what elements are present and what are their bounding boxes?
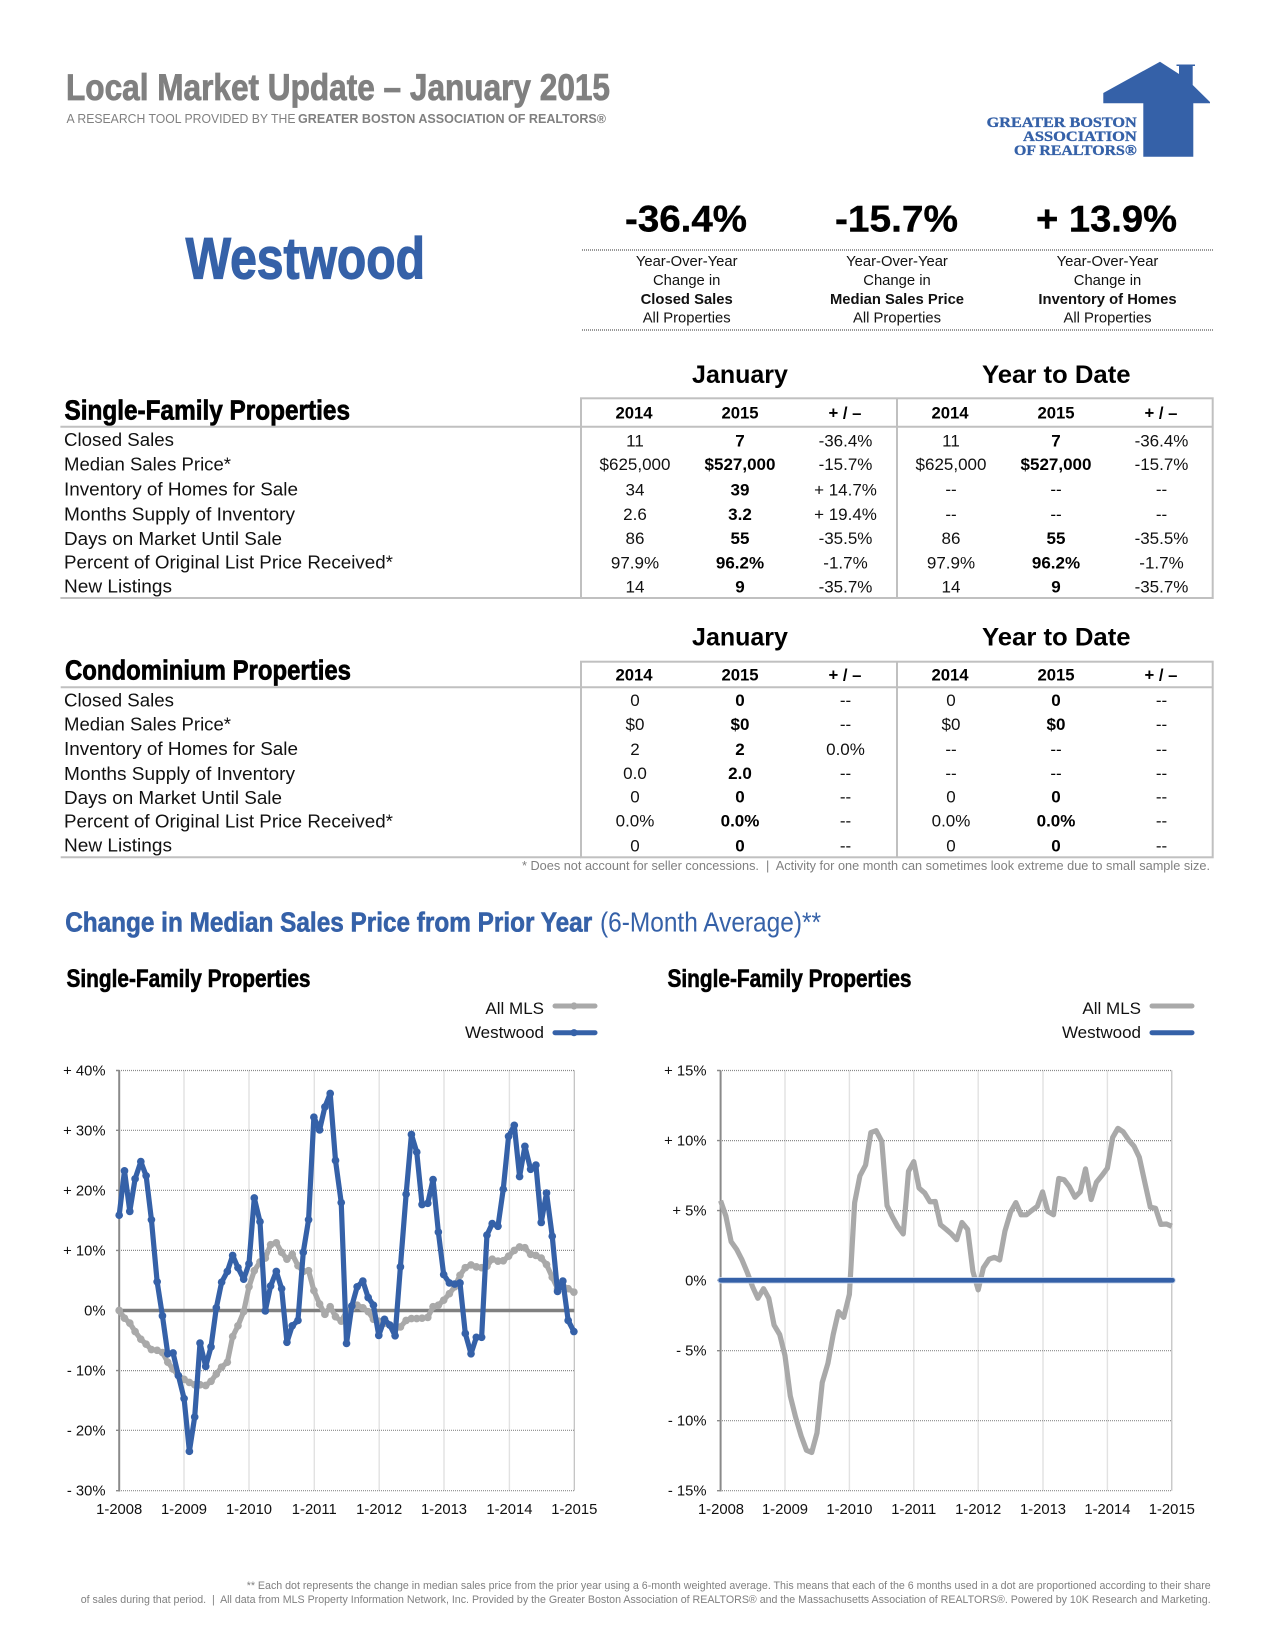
row labels: Days on Market Until Sale <box>64 528 282 549</box>
table values: -- <box>1156 505 1167 524</box>
x-axis labels: 1-2011 <box>891 1502 936 1518</box>
column headers <box>615 403 1177 422</box>
metric: median sales price: Median Sales Price <box>830 292 964 308</box>
panel: single-family properties table <box>60 361 1213 598</box>
table values: $0 <box>1047 715 1065 734</box>
row labels: Median Sales Price* <box>64 714 231 735</box>
table values: -- <box>840 837 851 856</box>
chart title: Single-Family Properties <box>66 965 310 993</box>
table values: 0.0% <box>1037 812 1075 831</box>
table values: 97.9% <box>611 553 659 572</box>
metric: inventory of homes <box>1036 199 1177 327</box>
table values: 86 <box>942 529 960 548</box>
panel: condominium properties table <box>61 624 1213 857</box>
table values: -35.7% <box>819 578 872 597</box>
table values <box>600 432 1188 597</box>
column headers: 2015 <box>1037 403 1075 422</box>
x-axis labels: 1-2014 <box>1084 1502 1130 1518</box>
x-axis labels: 1-2013 <box>421 1502 467 1518</box>
table values: 34 <box>626 480 644 499</box>
table values: -- <box>945 480 957 499</box>
table values: -- <box>1050 480 1062 499</box>
metric: closed sales: All Properties <box>643 311 731 327</box>
table values: -1.7% <box>1139 553 1184 572</box>
table values: $527,000 <box>1021 455 1091 474</box>
metric: median sales price: -15.7% <box>835 199 958 240</box>
metric: median sales price: All Properties <box>853 311 941 327</box>
table values: 11 <box>942 432 960 451</box>
row labels: New Listings <box>64 576 172 597</box>
table values: 0.0% <box>616 812 654 831</box>
y-axis labels: + 30% <box>63 1123 106 1139</box>
table values: 7 <box>735 432 745 451</box>
metric: closed sales: Closed Sales <box>641 292 733 308</box>
table values: 0.0% <box>826 740 865 759</box>
table values: 2 <box>630 740 640 759</box>
footer: methodology note: ** Each dot represents the change in median sales price from the prior year using a 6-month weighted average. This means that each of the 6 months used in a dot are proportioned according to their share <box>247 1580 1211 1592</box>
table values: 96.2% <box>1032 553 1080 572</box>
table values: $625,000 <box>916 455 986 474</box>
table values: -- <box>1156 480 1167 499</box>
y-axis labels: + 10% <box>664 1134 706 1150</box>
chart: left single-family line chart <box>63 965 597 1518</box>
y-axis labels: - 30% <box>67 1484 106 1500</box>
table values: 9 <box>1051 578 1061 597</box>
table values: 0.0 <box>623 764 647 783</box>
table values: 55 <box>1047 529 1065 548</box>
table values: 55 <box>731 529 749 548</box>
legend: Westwood <box>465 1023 544 1042</box>
table values: -- <box>840 764 851 783</box>
table values: 2.0 <box>728 764 752 783</box>
panel: single-family properties table: Year to Date <box>982 361 1131 389</box>
column headers <box>615 666 1177 685</box>
x-axis labels: 1-2009 <box>762 1502 808 1518</box>
column headers: 2015 <box>721 666 759 685</box>
row labels <box>64 429 393 597</box>
heading: town name Westwood: Westwood <box>186 227 425 292</box>
y-axis labels: 0% <box>685 1273 706 1289</box>
row labels: Closed Sales <box>64 429 174 450</box>
x-axis labels: 1-2010 <box>226 1502 272 1518</box>
x-axis labels: 1-2009 <box>161 1502 207 1518</box>
heading: change in median sales price: (6-Month Average)** <box>600 907 821 938</box>
table values: 11 <box>626 432 644 451</box>
footer: methodology note: of sales during that period. | All data from MLS Property Information Network, Inc. Provided by the Greater Boston Association of REALTORS® and the Massachusetts Association of REALTORS®. Powered by 10K Research and Marketing. <box>81 1594 1211 1606</box>
metric: closed sales: -36.4% <box>625 199 747 240</box>
x-axis labels: 1-2012 <box>955 1502 1001 1518</box>
table values: -- <box>1050 740 1062 759</box>
x-axis labels: 1-2015 <box>1149 1502 1195 1518</box>
table values: $527,000 <box>705 455 775 474</box>
table values: $0 <box>731 715 749 734</box>
heading: change in median sales price: Change in Median Sales Price from Prior Year <box>65 907 592 938</box>
x-axis labels: 1-2012 <box>356 1502 402 1518</box>
row labels: Closed Sales <box>64 690 174 711</box>
column headers: 2015 <box>1037 666 1075 685</box>
chart title: Single-Family Properties <box>668 965 912 993</box>
y-axis labels: + 15% <box>664 1064 706 1080</box>
table values: 0 <box>630 691 640 710</box>
logo: Greater Boston Association of Realtors: OF REALTORS® <box>1014 143 1137 159</box>
column headers: + / – <box>1145 666 1177 685</box>
y-axis labels: - 5% <box>676 1344 706 1360</box>
table values: -15.7% <box>1135 455 1188 474</box>
y-axis labels: + 10% <box>63 1243 106 1259</box>
footer: methodology note <box>81 1580 1211 1606</box>
y-axis labels: + 40% <box>63 1064 106 1080</box>
legend: All MLS <box>1082 999 1141 1018</box>
column headers: 2014 <box>931 403 969 422</box>
table values: 0 <box>735 837 745 856</box>
row labels: Median Sales Price* <box>64 454 231 475</box>
column headers: + / – <box>829 666 861 685</box>
logo: Greater Boston Association of Realtors: ASSOCIATION <box>1023 129 1137 145</box>
subtitle: research tool line: A RESEARCH TOOL PROVIDED BY THE <box>66 111 296 126</box>
table values: + 19.4% <box>814 505 877 524</box>
row labels: Percent of Original List Price Received* <box>64 811 393 832</box>
x-axis labels: 1-2013 <box>1020 1502 1066 1518</box>
table values: + 14.7% <box>814 480 877 499</box>
table values: -- <box>1156 764 1167 783</box>
table values: -35.5% <box>1135 529 1188 548</box>
table values: 0 <box>735 788 745 807</box>
legend <box>1062 999 1192 1042</box>
table values: -- <box>840 691 851 710</box>
table values: -- <box>840 812 851 831</box>
metric: inventory of homes: All Properties <box>1064 311 1152 327</box>
table values: $0 <box>942 715 960 734</box>
table values: 2 <box>735 740 745 759</box>
table values: 96.2% <box>716 553 764 572</box>
x-axis labels: 1-2015 <box>551 1502 597 1518</box>
y-axis labels: 0% <box>84 1304 106 1320</box>
row labels <box>64 690 393 856</box>
column headers: + / – <box>1145 403 1177 422</box>
table values: $0 <box>626 715 644 734</box>
table values: 0.0% <box>932 812 970 831</box>
y-axis labels: - 10% <box>668 1414 706 1430</box>
x-axis labels <box>698 1502 1195 1518</box>
column headers: 2014 <box>931 666 969 685</box>
series: Westwood flat line <box>721 1277 1172 1284</box>
table values: 0 <box>735 691 745 710</box>
table values: 0.0% <box>721 812 759 831</box>
x-axis labels: 1-2011 <box>292 1502 337 1518</box>
table values: -35.5% <box>819 529 872 548</box>
series: All MLS <box>721 1128 1172 1452</box>
panel: single-family properties table: January <box>692 361 788 389</box>
panel: condominium properties table: Year to Date <box>982 624 1131 652</box>
table values: 0 <box>630 788 640 807</box>
table values: -- <box>1156 837 1167 856</box>
subtitle: research tool line <box>66 111 606 126</box>
table values: -- <box>1050 764 1062 783</box>
table values: -- <box>1156 691 1167 710</box>
legend <box>465 999 595 1042</box>
footnote: seller concessions: * Does not account for seller concessions. | Activity for one month can sometimes look extreme due to small sample size. <box>522 859 1210 873</box>
metric: inventory of homes: Change in <box>1074 273 1141 289</box>
table values: -- <box>1156 740 1167 759</box>
legend: Westwood <box>1062 1023 1141 1042</box>
column headers: 2015 <box>721 403 759 422</box>
y-axis labels: + 20% <box>63 1183 106 1199</box>
table values: 0 <box>946 837 956 856</box>
table values: 39 <box>731 480 749 499</box>
table values: 0 <box>1051 788 1061 807</box>
y-axis labels: - 10% <box>67 1364 106 1380</box>
row labels: Inventory of Homes for Sale <box>64 738 298 759</box>
row labels: New Listings <box>64 835 172 856</box>
table values: -- <box>1156 715 1167 734</box>
table values: 0 <box>1051 691 1061 710</box>
x-axis labels: 1-2008 <box>96 1502 142 1518</box>
metric: median sales price: Year-Over-Year <box>846 254 948 270</box>
table values: 14 <box>942 578 960 597</box>
x-axis labels <box>96 1502 597 1518</box>
legend: All MLS <box>485 999 544 1018</box>
row labels: Inventory of Homes for Sale <box>64 479 298 500</box>
table values: 0 <box>946 691 956 710</box>
table values: 0 <box>630 837 640 856</box>
metric: closed sales: Change in <box>653 273 720 289</box>
chart: right single-family line chart <box>664 965 1195 1518</box>
y-axis labels <box>664 1064 706 1500</box>
x-axis labels: 1-2014 <box>486 1502 532 1518</box>
table values: 2.6 <box>623 505 647 524</box>
subtitle: research tool line: GREATER BOSTON ASSOCIATION OF REALTORS® <box>298 111 606 126</box>
x-axis labels: 1-2010 <box>826 1502 872 1518</box>
table values: -1.7% <box>823 553 868 572</box>
table values: 86 <box>626 529 644 548</box>
table values: $625,000 <box>600 455 670 474</box>
table values: -- <box>945 764 957 783</box>
y-axis labels: + 5% <box>672 1204 706 1220</box>
row labels: Percent of Original List Price Received* <box>64 552 393 573</box>
logo: Greater Boston Association of Realtors: GREATER BOSTON <box>987 115 1137 131</box>
heading: condominium properties: Condominium Properties <box>65 654 351 685</box>
column headers: 2014 <box>615 403 653 422</box>
metric: median sales price: Change in <box>863 273 931 289</box>
logo: Greater Boston Association of Realtors <box>987 62 1210 159</box>
panel: year-over-year key metrics <box>582 199 1213 330</box>
table values: -- <box>840 715 851 734</box>
table values: -36.4% <box>1135 432 1188 451</box>
series: Westwood <box>119 1094 574 1451</box>
table values: -- <box>840 788 851 807</box>
row labels: Days on Market Until Sale <box>64 787 282 808</box>
table values: -- <box>945 505 957 524</box>
metric: closed sales <box>625 199 747 327</box>
table values: -- <box>945 740 957 759</box>
table values: -- <box>1156 788 1167 807</box>
table values: -15.7% <box>819 455 872 474</box>
column headers: 2014 <box>615 666 653 685</box>
title: Local Market Update: Local Market Update – January 2015 <box>66 67 610 108</box>
table values: 9 <box>735 578 745 597</box>
table values: 14 <box>626 578 644 597</box>
table values <box>616 691 1167 856</box>
row labels: Months Supply of Inventory <box>64 763 296 784</box>
table values: 0 <box>946 788 956 807</box>
x-axis labels: 1-2008 <box>698 1502 744 1518</box>
heading: single-family properties: Single-Family Properties <box>64 394 350 425</box>
y-axis labels <box>63 1064 106 1500</box>
metric: median sales price <box>830 199 964 327</box>
panel: condominium properties table: January <box>692 624 788 652</box>
table values: -35.7% <box>1135 578 1188 597</box>
series: All MLS <box>119 1243 574 1386</box>
table values: -- <box>1050 505 1062 524</box>
metric: inventory of homes: Year-Over-Year <box>1057 254 1158 270</box>
column headers: + / – <box>829 403 861 422</box>
y-axis labels: - 15% <box>668 1484 706 1500</box>
table values: -- <box>1156 812 1167 831</box>
row labels: Months Supply of Inventory <box>64 504 296 525</box>
metric: inventory of homes: + 13.9% <box>1036 199 1177 240</box>
metric: closed sales: Year-Over-Year <box>636 254 738 270</box>
table values: 97.9% <box>927 553 975 572</box>
table values: 3.2 <box>728 505 752 524</box>
metric: inventory of homes: Inventory of Homes <box>1038 292 1177 308</box>
table values: -36.4% <box>819 432 872 451</box>
table values: 0 <box>1051 837 1061 856</box>
y-axis labels: - 20% <box>67 1423 106 1439</box>
table values: 7 <box>1051 432 1061 451</box>
